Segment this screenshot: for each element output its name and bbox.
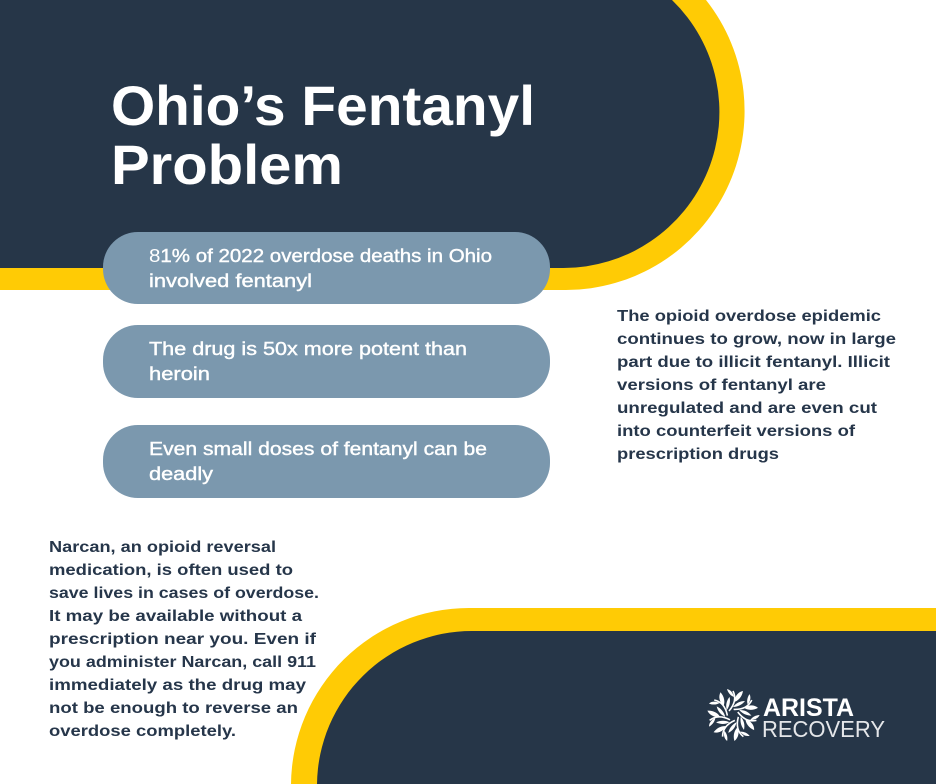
pill: small doses: [103, 425, 550, 498]
pill: small doses: deadly: [149, 463, 214, 484]
text block: epidemic: [617, 308, 896, 463]
text block: epidemic: versions of fentanyl are: [617, 377, 826, 394]
title: [111, 74, 535, 196]
logo wordmark: ARISTA: [763, 694, 854, 722]
pill: 81% of deaths: [103, 232, 550, 304]
title: Problem: [111, 133, 343, 196]
icon: radial leaf branches: [705, 689, 761, 744]
pill: small doses: Even small doses of fentanyl can be: [149, 438, 487, 459]
pill: 50x more potent: [103, 325, 550, 398]
logo wordmark: [762, 694, 885, 742]
pill: 50x more potent: The drug is 50x more potent than: [149, 338, 467, 359]
logo: Arista Recovery: [705, 689, 885, 744]
pill: 50x more potent: heroin: [149, 363, 210, 384]
text block: Narcan: [49, 539, 319, 740]
title: Ohio’s Fentanyl: [111, 74, 535, 137]
text block: Narcan: save lives in cases of overdose.: [49, 585, 319, 602]
text block: epidemic: unregulated and are even cut: [617, 400, 878, 417]
text block: Narcan: immediately as the drug may: [49, 677, 306, 694]
pill: 81% of deaths: involved fentanyl: [149, 270, 312, 291]
bottom yellow arc: [291, 608, 936, 784]
pill: 81% of deaths: 81% of 2022 overdose deaths in Ohio: [149, 245, 492, 266]
text block: Narcan: you administer Narcan, call 911: [49, 654, 316, 671]
text block: epidemic: The opioid overdose epidemic: [617, 308, 881, 325]
text block: epidemic: prescription drugs: [617, 446, 779, 463]
text block: epidemic: continues to grow, now in large: [617, 331, 896, 348]
text block: Narcan: medication, is often used to: [49, 562, 293, 579]
top yellow band and arc: [0, 0, 745, 290]
text block: epidemic: part due to illicit fentanyl. Illicit: [617, 354, 891, 371]
text block: Narcan: Narcan, an opioid reversal: [49, 539, 276, 556]
logo wordmark: RECOVERY: [762, 716, 885, 742]
text block: Narcan: It may be available without a: [49, 608, 302, 625]
text block: Narcan: overdose completely.: [49, 723, 236, 740]
text block: Narcan: prescription near you. Even if: [49, 631, 317, 648]
text block: epidemic: into counterfeit versions of: [617, 423, 856, 440]
top navy panel: [0, 0, 719, 268]
text block: Narcan: not be enough to reverse an: [49, 700, 298, 717]
bottom navy panel: [317, 631, 936, 784]
